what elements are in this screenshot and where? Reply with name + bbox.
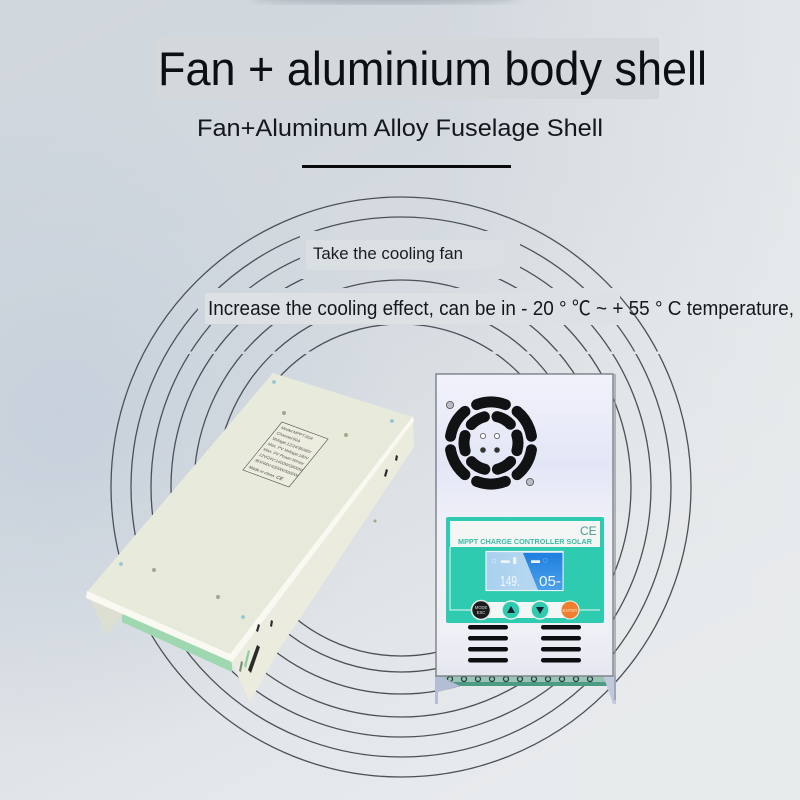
ventilation slots (468, 625, 581, 662)
rating label: Made in china (248, 465, 276, 478)
screws (119, 380, 394, 619)
buttons: MODE (475, 605, 487, 610)
panel header: CE (580, 524, 597, 538)
white edges (86, 416, 414, 662)
buttons (472, 600, 579, 620)
buttons: ENTER (563, 608, 577, 613)
panel header (450, 521, 600, 547)
mounting legs (435, 675, 460, 704)
right device: MPPT charge controller front (435, 374, 616, 704)
top face (87, 373, 413, 656)
LCD display: 149. (500, 573, 520, 590)
panel header: MPPT CHARGE CONTROLLER SOLAR (458, 537, 593, 546)
rating label: 12V/24V:1400W/2800W (258, 452, 305, 473)
LCD display: ☼ ▬ ▮ (490, 555, 517, 565)
side wall (228, 417, 414, 702)
fan hub screws (446, 401, 534, 486)
green circuit board edge (122, 612, 232, 672)
LCD display (486, 552, 563, 590)
front flap (88, 596, 123, 635)
left device: rear view of aluminium shell (86, 373, 414, 702)
text: take the cooling fan: Take the cooling fan (313, 244, 463, 263)
teal control panel (446, 517, 604, 623)
concentric rings (111, 197, 691, 777)
heading rule (302, 165, 511, 168)
rating label: 36V/48V:4200W/5600W (253, 458, 300, 478)
enclosure (436, 374, 613, 676)
rating label (243, 422, 329, 487)
text: take the cooling fan (306, 240, 510, 270)
rating label: CE (274, 475, 285, 482)
rating label: Max. PV Power:Wmax (262, 447, 306, 466)
side vents (248, 455, 398, 673)
buttons: ESC (477, 610, 485, 615)
terminal strip (437, 675, 613, 686)
LCD display: ▬ ◌ (531, 555, 548, 565)
rating label: Voltage:12/24/36/48V (271, 436, 313, 454)
subtitle: Fan+Aluminum Alloy Fuselage Shell (197, 115, 603, 142)
rating label: Channel:60A (275, 431, 302, 443)
rating label: Model:MPPT-50A (280, 425, 315, 441)
LCD display: 05- (539, 573, 561, 590)
cooling fan grille (438, 390, 544, 496)
rating label: Max. PV Voltage:180V (267, 442, 310, 460)
title: Fan + aluminium body shell (158, 42, 707, 95)
